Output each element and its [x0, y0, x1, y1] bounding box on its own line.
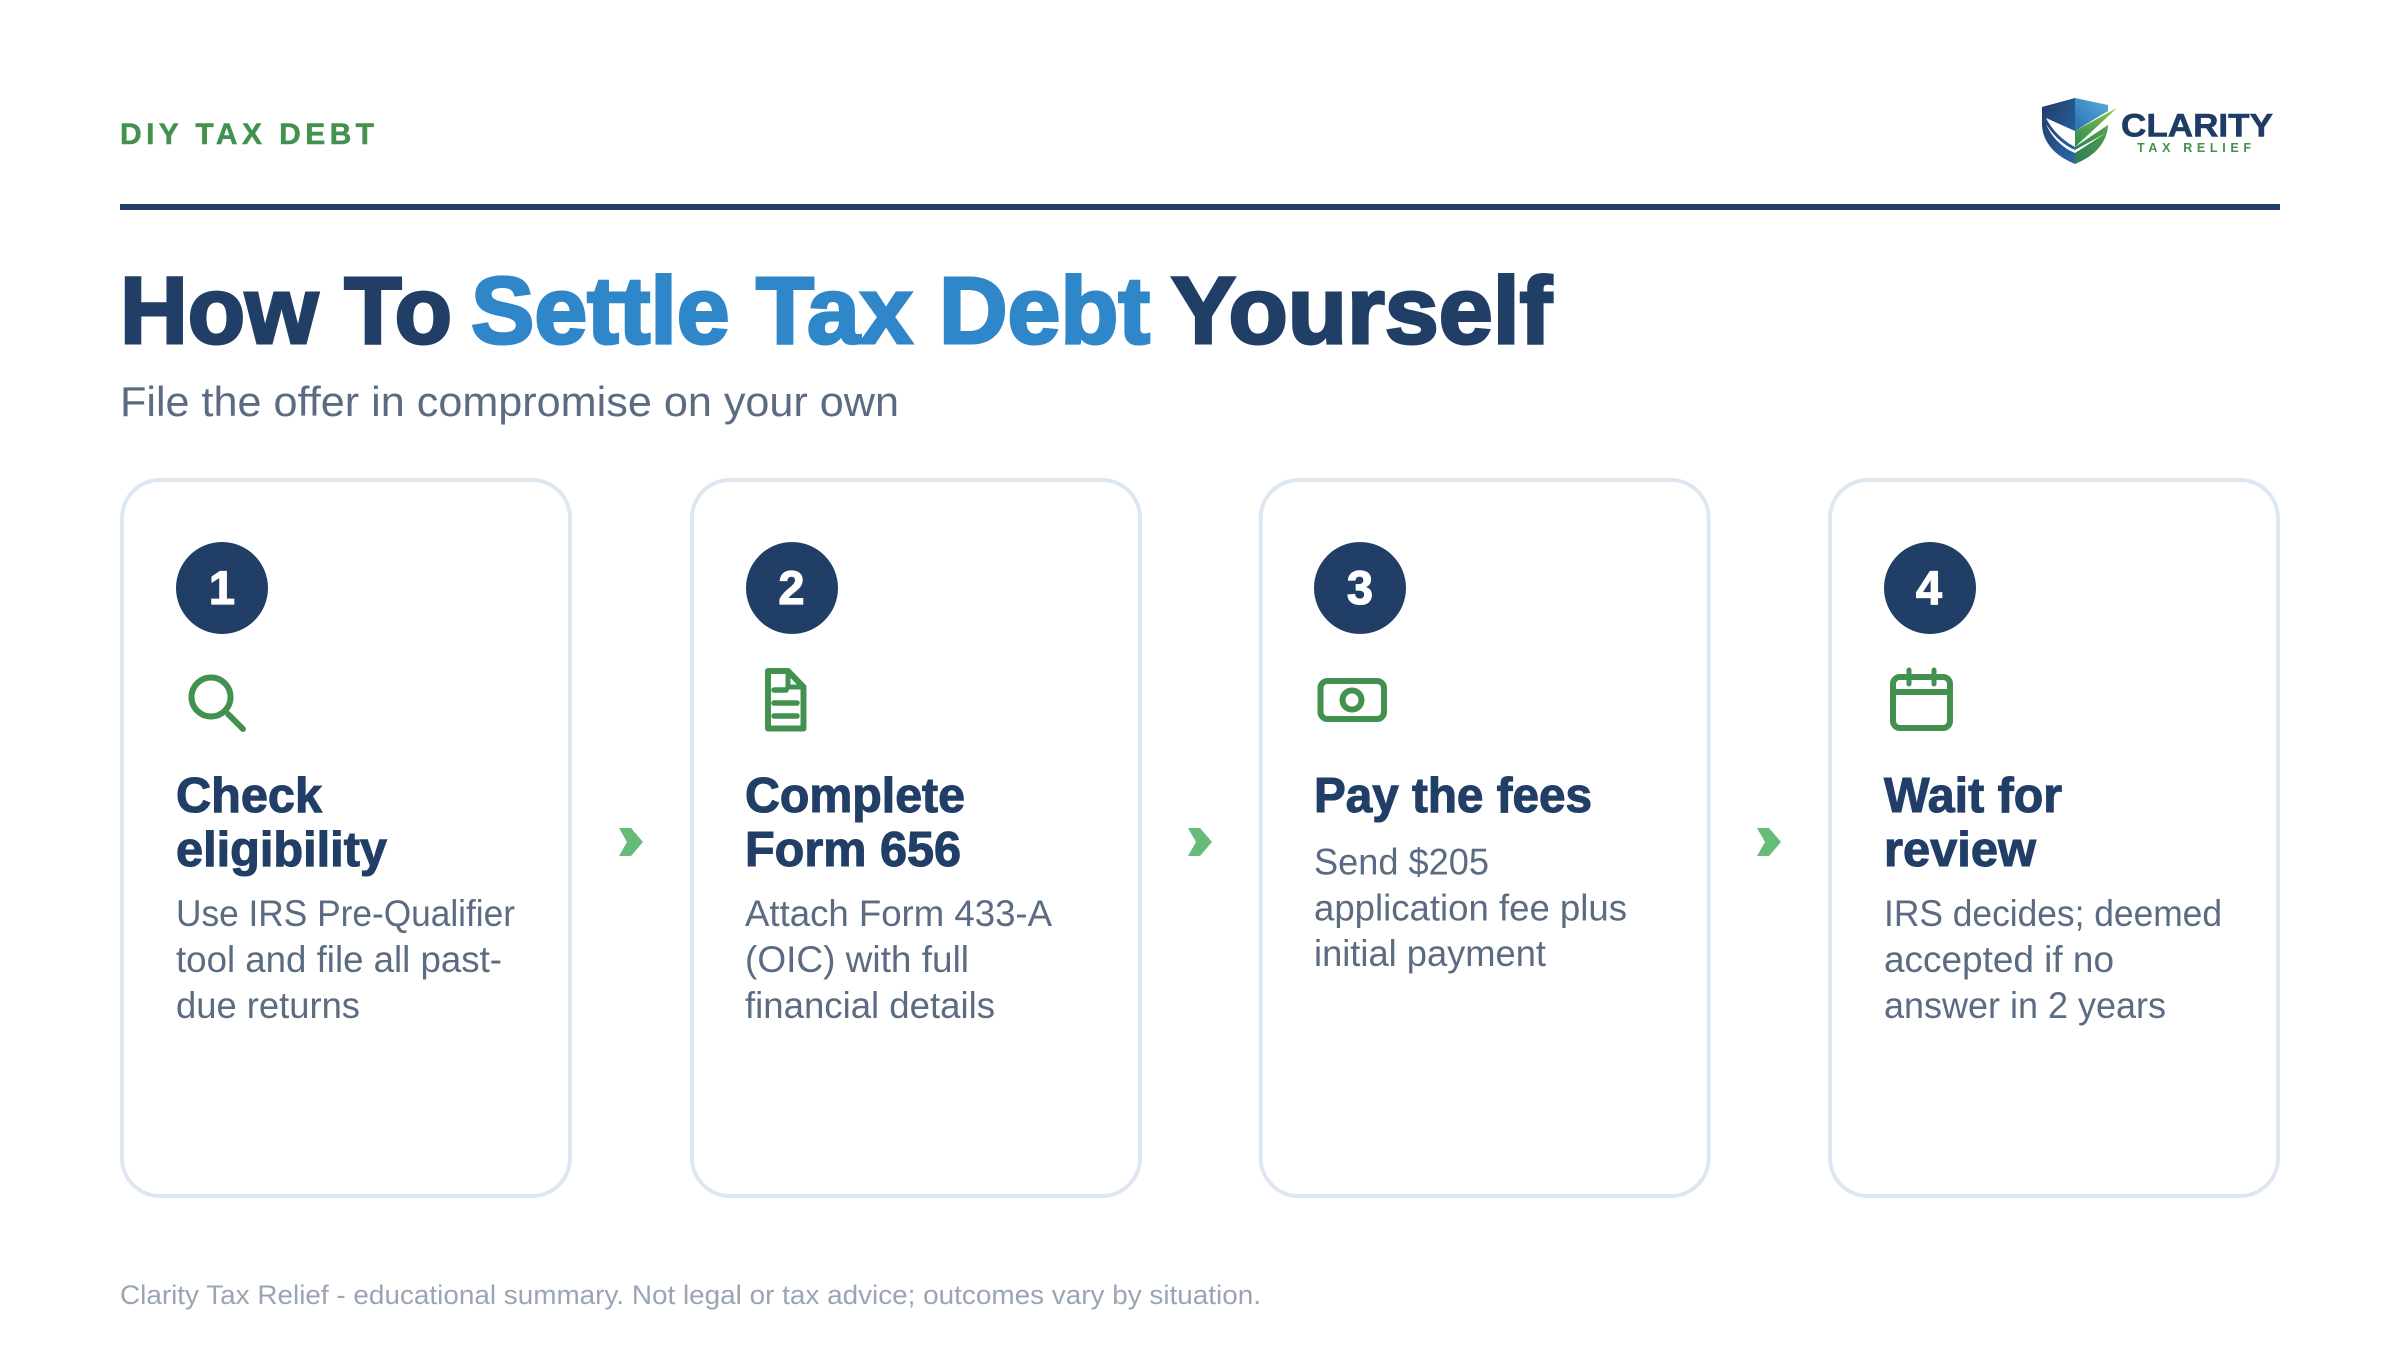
icon: document — [768, 671, 804, 728]
eyebrow label: DIY TAX DEBT — [120, 118, 374, 151]
description: IRS decides; deemed — [1884, 893, 2222, 934]
heading — [176, 769, 387, 877]
title: Yourself — [1171, 258, 1552, 364]
description — [176, 893, 515, 1026]
heading: Pay the fees — [1314, 769, 1592, 823]
heading: eligibility — [176, 823, 387, 877]
step number 1: 1 — [209, 561, 235, 614]
panel: step 3 pay the fees — [1261, 480, 1709, 1196]
heading: Check — [176, 769, 323, 823]
description: initial payment — [1314, 933, 1547, 974]
description: Send $205 — [1314, 842, 1489, 882]
description — [745, 893, 1052, 1026]
description — [1884, 893, 2222, 1026]
panel: step 4 wait for review — [1830, 480, 2278, 1196]
heading: Complete — [745, 769, 965, 823]
description: application fee plus — [1314, 888, 1627, 928]
icon: banknote — [1320, 681, 1384, 719]
title — [120, 258, 1552, 364]
arrow 2 to 3 — [1188, 828, 1212, 856]
step number 3 — [1314, 542, 1406, 634]
logo wordmark: CLARITY — [2121, 108, 2273, 144]
logo tagline: TAX RELIEF — [2137, 141, 2251, 155]
arrow 3 to 4 — [1757, 828, 1781, 856]
description: financial details — [745, 985, 995, 1026]
logo: Clarity Tax Relief — [2042, 98, 2273, 164]
heading — [745, 769, 965, 877]
description: accepted if no — [1884, 939, 2114, 980]
arrow 1 to 2 — [619, 828, 643, 856]
logo shield — [2042, 98, 2117, 164]
description: due returns — [176, 985, 360, 1026]
step number 4 — [1884, 542, 1976, 634]
footer disclaimer: Clarity Tax Relief - educational summary. Not legal or tax advice; outcomes vary by situation. — [120, 1280, 1261, 1310]
description: Attach Form 433-A — [745, 893, 1052, 934]
description: Use IRS Pre-Qualifier — [176, 893, 515, 934]
title: How To — [120, 258, 452, 364]
step number 3: 3 — [1347, 561, 1373, 614]
description: tool and file all past- — [176, 939, 502, 980]
header rule — [120, 204, 2280, 210]
panel: step 1 check eligibility — [122, 480, 570, 1196]
description: (OIC) with full — [745, 939, 969, 980]
heading: Wait for — [1884, 769, 2062, 823]
subtitle: File the offer in compromise on your own — [120, 378, 899, 425]
description: answer in 2 years — [1884, 985, 2166, 1026]
panel: step 2 complete form 656 — [692, 480, 1140, 1196]
step number 2: 2 — [778, 561, 805, 614]
icon: calendar — [1893, 670, 1950, 728]
step number 2 — [746, 542, 838, 634]
title: Settle Tax Debt — [471, 258, 1150, 364]
step number 1 — [176, 542, 268, 634]
icon: magnifying glass — [192, 678, 243, 729]
step number 4: 4 — [1916, 561, 1942, 614]
heading: Form 656 — [745, 823, 961, 877]
heading: review — [1884, 823, 2037, 877]
heading — [1884, 769, 2062, 877]
description — [1314, 842, 1627, 974]
